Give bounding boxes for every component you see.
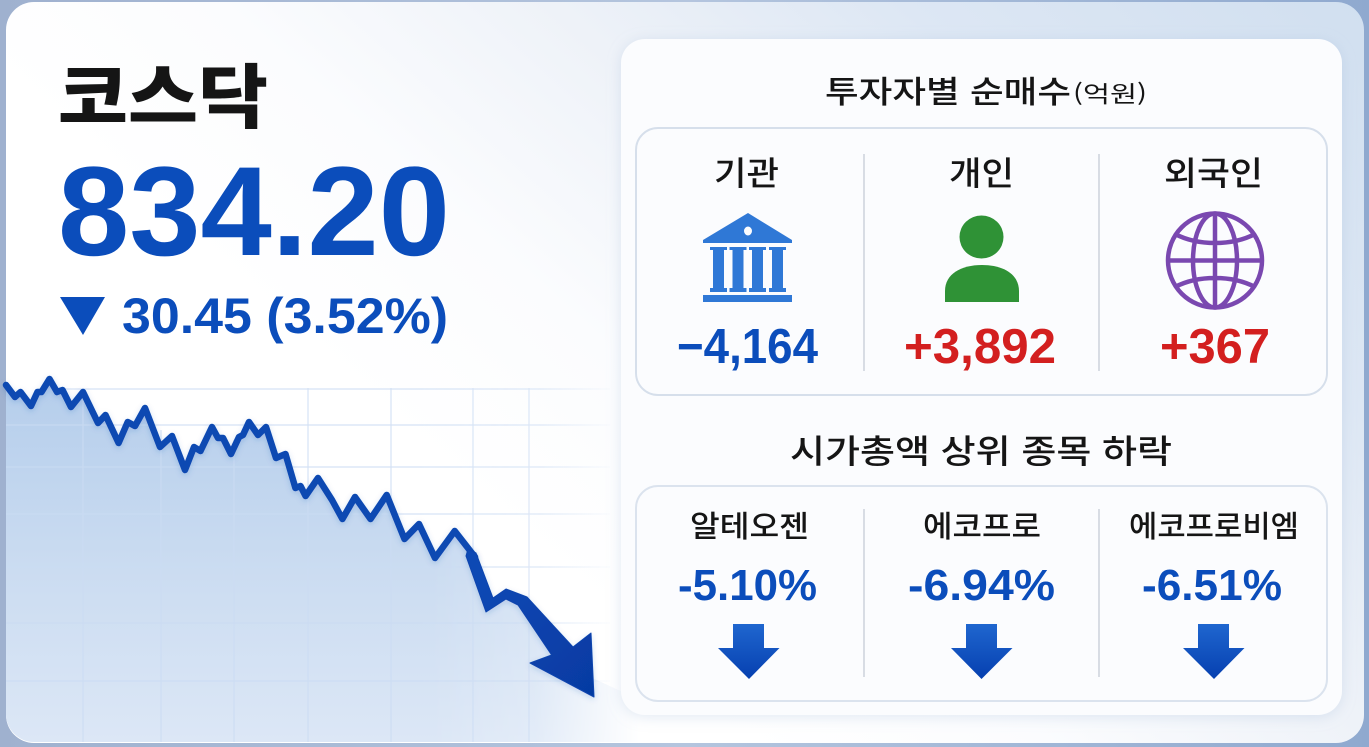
stock: Alteogen: 알테오젠 (690, 502, 809, 546)
dividers (864, 509, 1099, 677)
headline: index name: 코스닥 (58, 42, 268, 143)
stock: EcoPro: 에코프로 (923, 502, 1041, 546)
dividers (864, 154, 1099, 371)
index value: 834.20 (58, 140, 450, 282)
panel: investors and top stocks (621, 39, 1342, 715)
change text: 30.45 (3.52%) (122, 288, 448, 344)
stock: Alteogen (678, 502, 817, 679)
card: stocks (636, 486, 1327, 701)
investor: individual: 개인 (949, 147, 1014, 195)
panel background (621, 39, 1342, 715)
card: investors (636, 128, 1327, 395)
investor: individual: +3,892 (904, 320, 1056, 374)
heading: net purchase by investor (825, 67, 1147, 112)
heading: net purchase by investor: 투자자별 순매수 (825, 67, 1071, 112)
investor: foreign: 외국인 (1164, 147, 1263, 195)
stock: EcoPro (908, 502, 1055, 679)
icon: down arrow (1183, 624, 1244, 679)
stock: EcoPro BM (1129, 502, 1299, 679)
investor: institution (677, 147, 818, 374)
heading: net purchase by investor: (억원) (1073, 75, 1147, 109)
card outline (636, 486, 1327, 701)
icon: down arrow (951, 624, 1012, 679)
chart grid (6, 388, 610, 742)
chart arrow (466, 549, 594, 697)
stock: EcoPro BM: -6.51% (1142, 561, 1282, 610)
stock: EcoPro BM: 에코프로비엠 (1129, 502, 1299, 546)
stock: Alteogen: -5.10% (678, 561, 817, 610)
card outline (636, 128, 1327, 395)
icon: down arrow (718, 624, 780, 679)
chart area fill (6, 379, 640, 742)
icon: person (945, 216, 1019, 302)
heading: top market-cap decliners: 시가총액 상위 종목 하락 (790, 425, 1172, 473)
investor: individual (904, 147, 1056, 374)
index change (60, 288, 448, 344)
investor: foreign: +367 (1160, 320, 1270, 374)
icon: globe (1168, 214, 1262, 308)
stock: EcoPro: -6.94% (908, 561, 1055, 610)
chart line (6, 379, 475, 558)
investor: foreign (1160, 147, 1270, 374)
icon: down triangle (60, 297, 105, 335)
investor: institution: −4,164 (677, 320, 818, 374)
icon: bank (703, 213, 792, 302)
line chart: falling index (6, 379, 640, 742)
investor: institution: 기관 (714, 147, 779, 195)
